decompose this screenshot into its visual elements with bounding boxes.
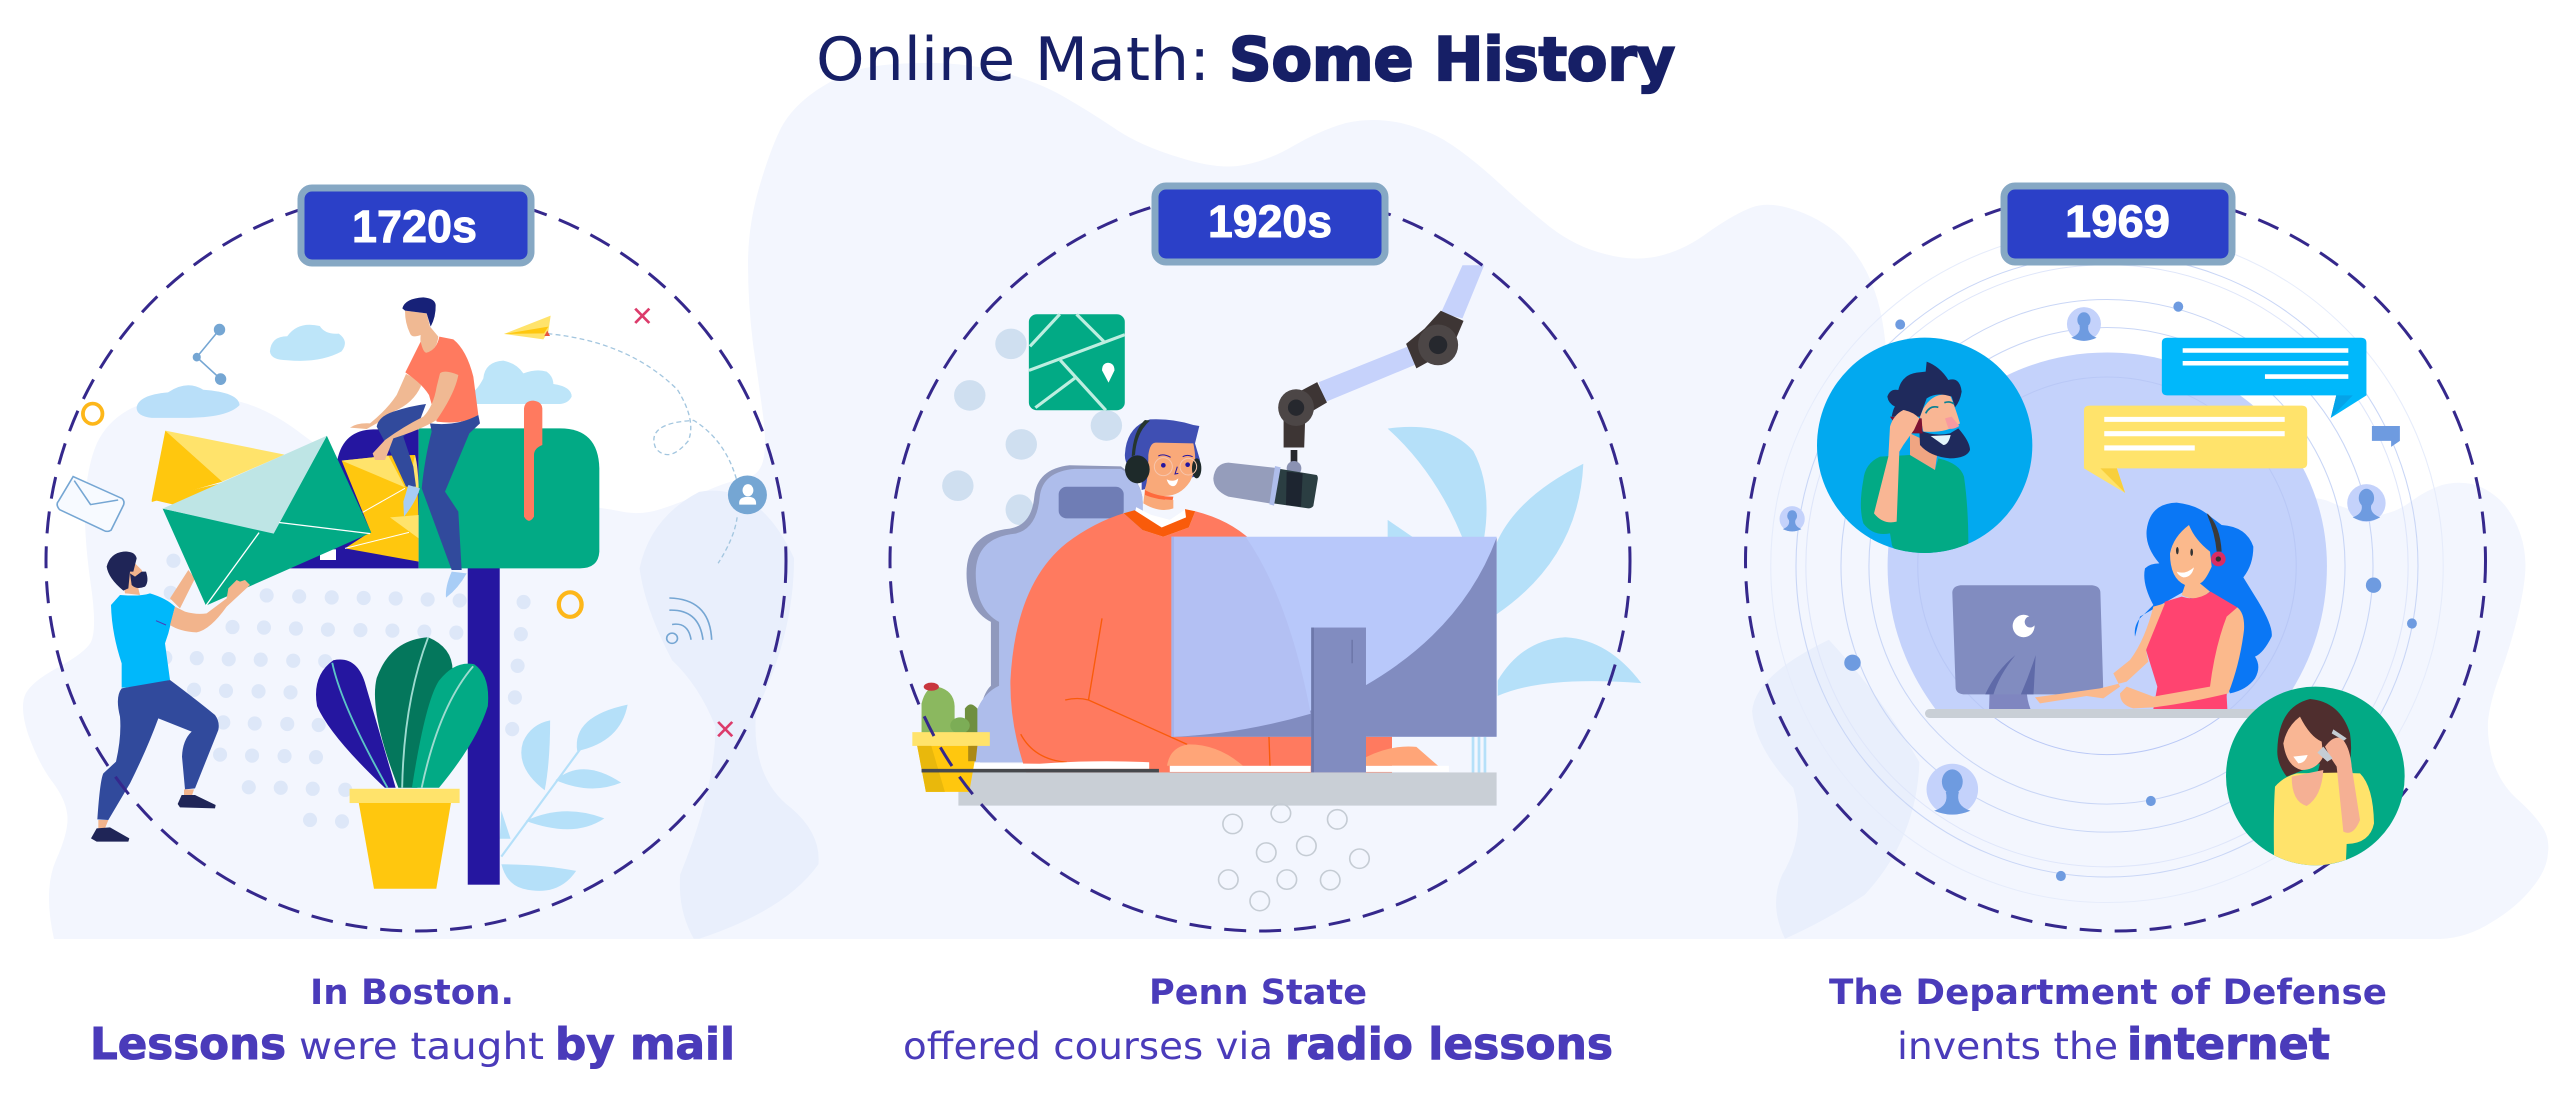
icon: contact 2: [1780, 506, 1805, 532]
icon: user badge: [728, 476, 767, 514]
caption: 1720s: by mail: [555, 1019, 735, 1070]
speech bubble: yellow: [2084, 406, 2307, 493]
green envelope: [163, 436, 371, 606]
microphone and host head: [1125, 419, 1318, 510]
chair: [967, 465, 1143, 762]
icon: map tile: [1029, 314, 1125, 410]
rear arm of bearded man: [170, 570, 195, 608]
icon: contact 3: [2347, 484, 2386, 522]
avatar: woman on phone: [2226, 687, 2405, 867]
speech bubble: blue: [2162, 338, 2366, 418]
panel: 1920s radio: [890, 186, 1641, 1070]
icon: rings: [83, 404, 582, 617]
icon: envelope outline: [57, 477, 124, 531]
icon: network nodes: [193, 324, 225, 384]
background blob: darker left: [640, 491, 819, 939]
network dots: [1844, 302, 2417, 881]
date label: 1720s: 1720s: [352, 201, 477, 252]
host body: [1010, 507, 1438, 772]
panel: 1969 internet: [1746, 186, 2486, 1070]
cactus: [912, 683, 990, 792]
dot pattern: [158, 554, 531, 829]
title: Online Math:: [816, 25, 1210, 95]
title: [816, 25, 1675, 95]
inner ring: [1918, 377, 2296, 755]
lilac circle: [1888, 353, 2327, 710]
microphone: [1213, 450, 1318, 508]
caption: 1920s: Penn State: [1149, 973, 1367, 1013]
paper plane: [504, 316, 551, 339]
yellow envelope: [152, 431, 285, 507]
date label: 1969: 1969: [2065, 196, 2170, 247]
avatar: man on phone: [1817, 338, 2032, 557]
date label: 1720s: [301, 188, 531, 263]
circle outlines: [1219, 804, 1369, 911]
clouds: [137, 325, 345, 418]
caption: 1720s: Lessons: [90, 1019, 286, 1070]
mailbox body: [419, 428, 599, 568]
sitting man: [350, 297, 480, 598]
blue leaves: [1388, 427, 1641, 772]
monitor: [1171, 537, 1497, 772]
illustration: backdrop icons: [57, 309, 767, 891]
background blob: darker right: [1752, 640, 1919, 939]
cloud: [472, 361, 572, 404]
icon: wifi signal: [667, 598, 712, 643]
book spine: [922, 769, 1159, 772]
caption: 1720s: [90, 973, 735, 1070]
illustration: radio studio: [942, 265, 1641, 772]
mailbox, cloud and plane: [290, 316, 599, 568]
mailbox back: [290, 429, 419, 568]
icon: contact 1: [2067, 307, 2101, 341]
dashed circle: [890, 191, 1630, 931]
host body and desk: [912, 507, 1497, 911]
desk: [958, 772, 1497, 806]
date label: 1969: [2004, 186, 2232, 262]
mailbox flag: [524, 401, 542, 521]
light blue branch: [500, 705, 628, 891]
icon: small chat: [2372, 426, 2400, 447]
caption: 1969: internet: [2127, 1019, 2330, 1070]
potted plant: [316, 637, 488, 889]
computer: [1952, 585, 2103, 710]
caption: 1720s: In Boston.: [310, 973, 514, 1013]
background dots: [942, 329, 1122, 525]
mic arm: [1278, 265, 1484, 447]
caption: 1920s: offered courses via: [903, 1025, 1273, 1068]
caption: 1969: The Department of Defense: [1829, 973, 2387, 1013]
mailbox post: [468, 566, 500, 885]
date label: 1920s: [1155, 186, 1385, 262]
caption: 1720s: were taught: [299, 1025, 544, 1068]
letter in mailbox: [342, 455, 419, 562]
caption: 1969: [1829, 973, 2387, 1070]
caption: 1920s: radio lessons: [1285, 1019, 1613, 1070]
background blob: [23, 63, 2548, 939]
network rings: [1771, 229, 2443, 903]
dashed circle: [46, 191, 786, 931]
illustration: network and chat: [1771, 229, 2443, 903]
date label: 1920s: 1920s: [1208, 196, 1332, 247]
bearded man: [91, 552, 250, 842]
radio host head: [1125, 419, 1201, 510]
icon: contact 4: [1927, 764, 1978, 815]
table: [1925, 709, 2260, 718]
title: Some History: [1229, 25, 1675, 95]
caption: 1969: invents the: [1897, 1025, 2118, 1068]
keyboard and book: [931, 761, 1449, 772]
dashed circle: [1746, 191, 2486, 931]
woman at computer: [2035, 503, 2272, 709]
icon: paper plane path: [547, 334, 737, 563]
icon: crosses: [635, 309, 732, 736]
panel: 1720s mailbox: [46, 188, 786, 1070]
white letter edge: [320, 549, 336, 560]
caption: 1920s: [903, 973, 1613, 1070]
